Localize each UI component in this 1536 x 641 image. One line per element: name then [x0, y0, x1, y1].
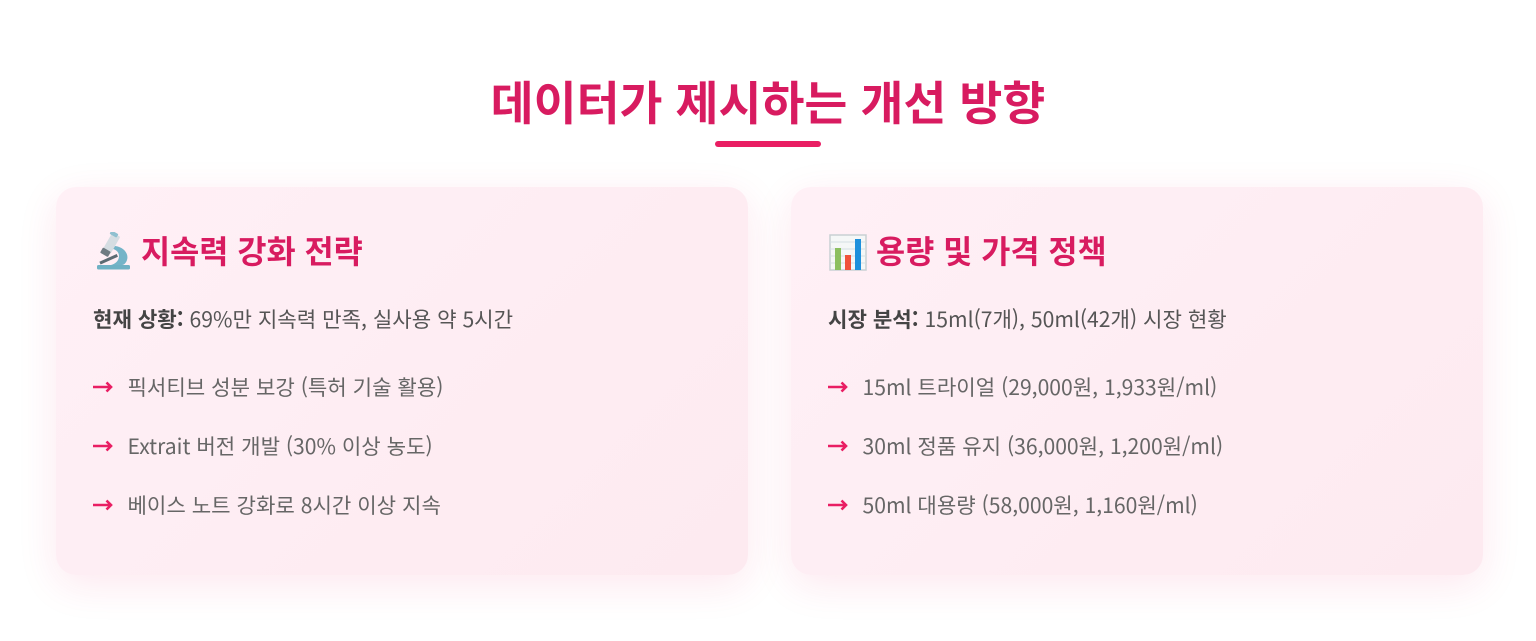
list item: 50ml 대용량 (58,000원, 1,160원/ml): [862, 489, 1198, 520]
current situation text: 현재 상황: 69%만 지속력 만족, 실사용 약 5시간: [93, 303, 513, 334]
market analysis text: 시장 분석: 15ml(7개), 50ml(42개) 시장 현황: [828, 303, 1227, 334]
list item: 픽서티브 성분 보강 (특허 기술 활용): [128, 371, 443, 402]
list item: 30ml 정품 유지 (36,000원, 1,200원/ml): [862, 430, 1223, 461]
icon: bar chart: [829, 234, 867, 271]
list item: 15ml 트라이얼 (29,000원, 1,933원/ml): [862, 371, 1217, 402]
icon: microscope: [97, 232, 130, 270]
panel: volume and price policy: [791, 187, 1483, 575]
panel: durability strategy: [56, 187, 748, 575]
panel heading: 용량 및 가격 정책: [876, 227, 1107, 273]
panel heading: 지속력 강화 전략: [141, 227, 363, 273]
list item: 베이스 노트 강화로 8시간 이상 지속: [128, 489, 441, 520]
title underline: [715, 141, 821, 147]
title: 데이터가 제시하는 개선 방향: [491, 67, 1045, 134]
list item: Extrait 버전 개발 (30% 이상 농도): [128, 430, 433, 461]
